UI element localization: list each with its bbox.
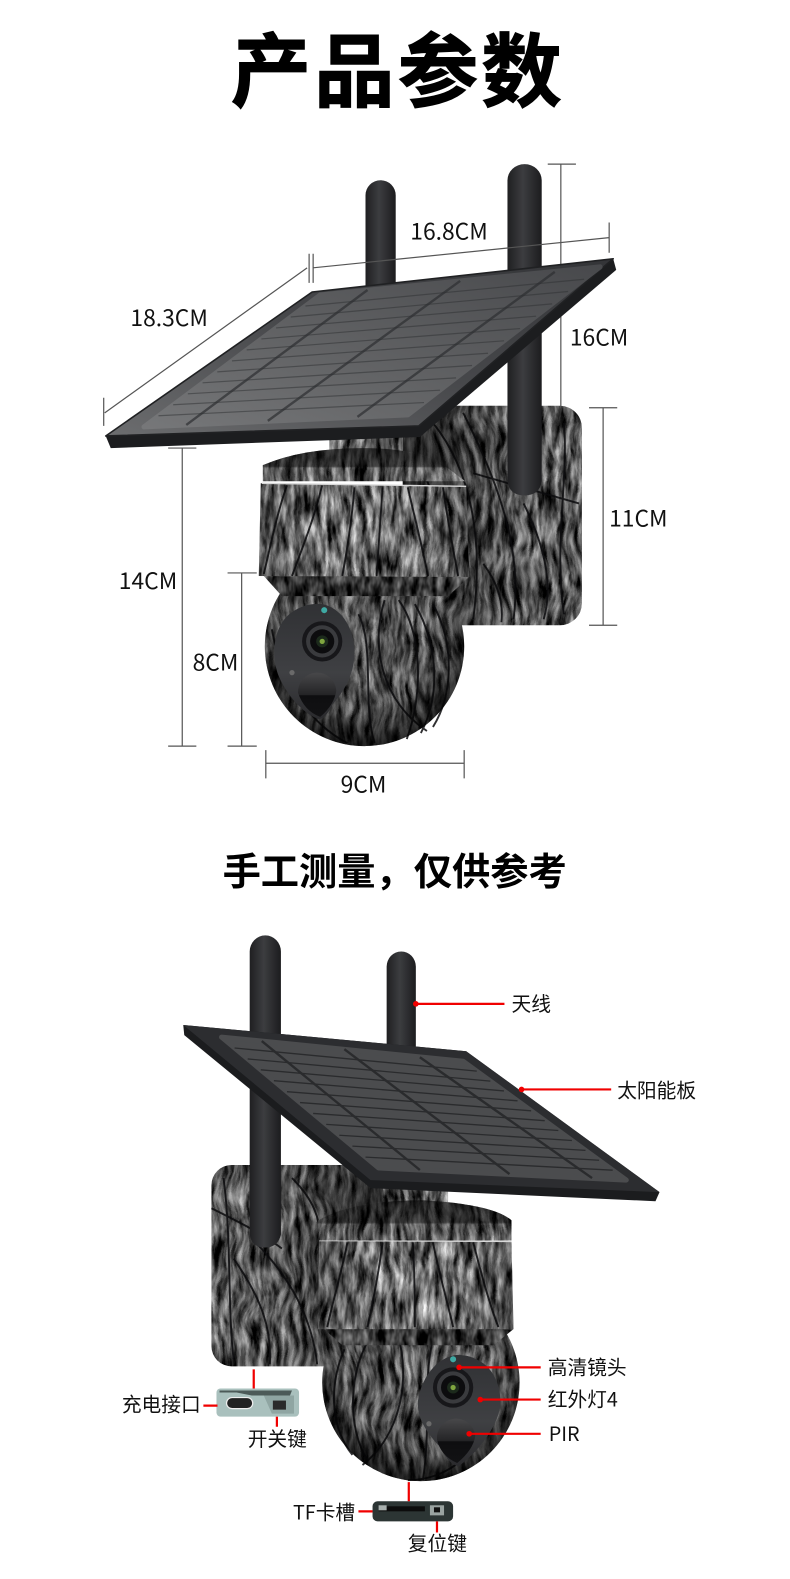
status light	[321, 607, 327, 613]
dimension: 9CM: 9CM	[341, 765, 386, 799]
inset: charging port strip	[216, 1388, 299, 1417]
status light	[450, 1356, 456, 1362]
dimension: 8CM: 8CM	[193, 644, 238, 678]
housing band	[318, 1240, 514, 1329]
callout: antenna: 天线	[511, 988, 551, 1017]
callout: solar panel	[519, 1075, 696, 1104]
dimension: 16CM line	[548, 164, 576, 408]
callout: antenna	[413, 988, 551, 1017]
dimension: 14CM	[119, 448, 196, 746]
callout: power switch: 开关键	[248, 1423, 307, 1452]
callout: reset button: 复位键	[408, 1528, 467, 1557]
dimension: 16CM label: 16CM	[570, 318, 628, 352]
top dome	[318, 1200, 511, 1240]
neck ring	[264, 576, 469, 596]
post	[383, 1183, 448, 1203]
infrared light	[426, 1421, 432, 1426]
neck ring	[324, 1329, 514, 1345]
faceplate	[274, 604, 354, 719]
callout: infrared light	[477, 1384, 618, 1413]
wall mount	[403, 406, 582, 625]
infrared light	[289, 670, 295, 675]
callout: PIR: PIR	[549, 1418, 580, 1447]
dimension: 8CM	[193, 573, 257, 746]
camera head	[259, 431, 469, 746]
callout: charging port	[122, 1369, 254, 1418]
wall mount	[211, 1165, 393, 1366]
PIR sensor	[298, 673, 336, 717]
figure: camera parts	[122, 935, 696, 1557]
antenna: rear left	[365, 180, 396, 302]
figure: camera dimensions	[104, 164, 668, 799]
post	[329, 431, 403, 453]
lens	[433, 1367, 473, 1408]
ball	[322, 1284, 520, 1481]
dimension: 16.8CM: 16.8CM	[410, 213, 488, 247]
callout: infrared light: 红外灯4	[548, 1384, 618, 1413]
dimension: 14CM: 14CM	[119, 562, 177, 596]
callout: HD lens: 高清镜头	[548, 1351, 627, 1380]
solar panel	[183, 1025, 660, 1201]
dimension: 18.3CM: 18.3CM	[130, 299, 208, 333]
ball	[265, 547, 464, 746]
callout: PIR	[466, 1418, 580, 1447]
inset: TF card strip	[373, 1501, 453, 1521]
dimension: 11CM	[589, 408, 668, 625]
callout: TF card slot: TF卡槽	[293, 1496, 355, 1525]
callout: solar panel: 太阳能板	[617, 1075, 696, 1104]
callout: charging port: 充电接口	[122, 1389, 201, 1418]
dimension: 16.8CM	[313, 213, 609, 283]
callout: TF card slot	[293, 1482, 409, 1525]
PIR sensor	[437, 1419, 475, 1463]
solar panel	[106, 259, 616, 448]
antenna: rear right	[387, 952, 416, 1067]
housing band	[259, 483, 469, 577]
callout: HD lens	[456, 1351, 627, 1380]
top dome	[263, 448, 465, 481]
subtitle: 手工测量，仅供参考	[223, 842, 567, 897]
camera head	[318, 1183, 520, 1481]
antenna: front left	[250, 935, 281, 1248]
lens	[302, 621, 342, 662]
title: 产品参数	[231, 9, 565, 125]
faceplate	[418, 1355, 500, 1466]
antenna: right	[507, 164, 542, 495]
dimension: 18.3CM	[104, 254, 309, 426]
dimension: 9CM	[266, 750, 464, 799]
dimension: 11CM: 11CM	[609, 500, 668, 534]
